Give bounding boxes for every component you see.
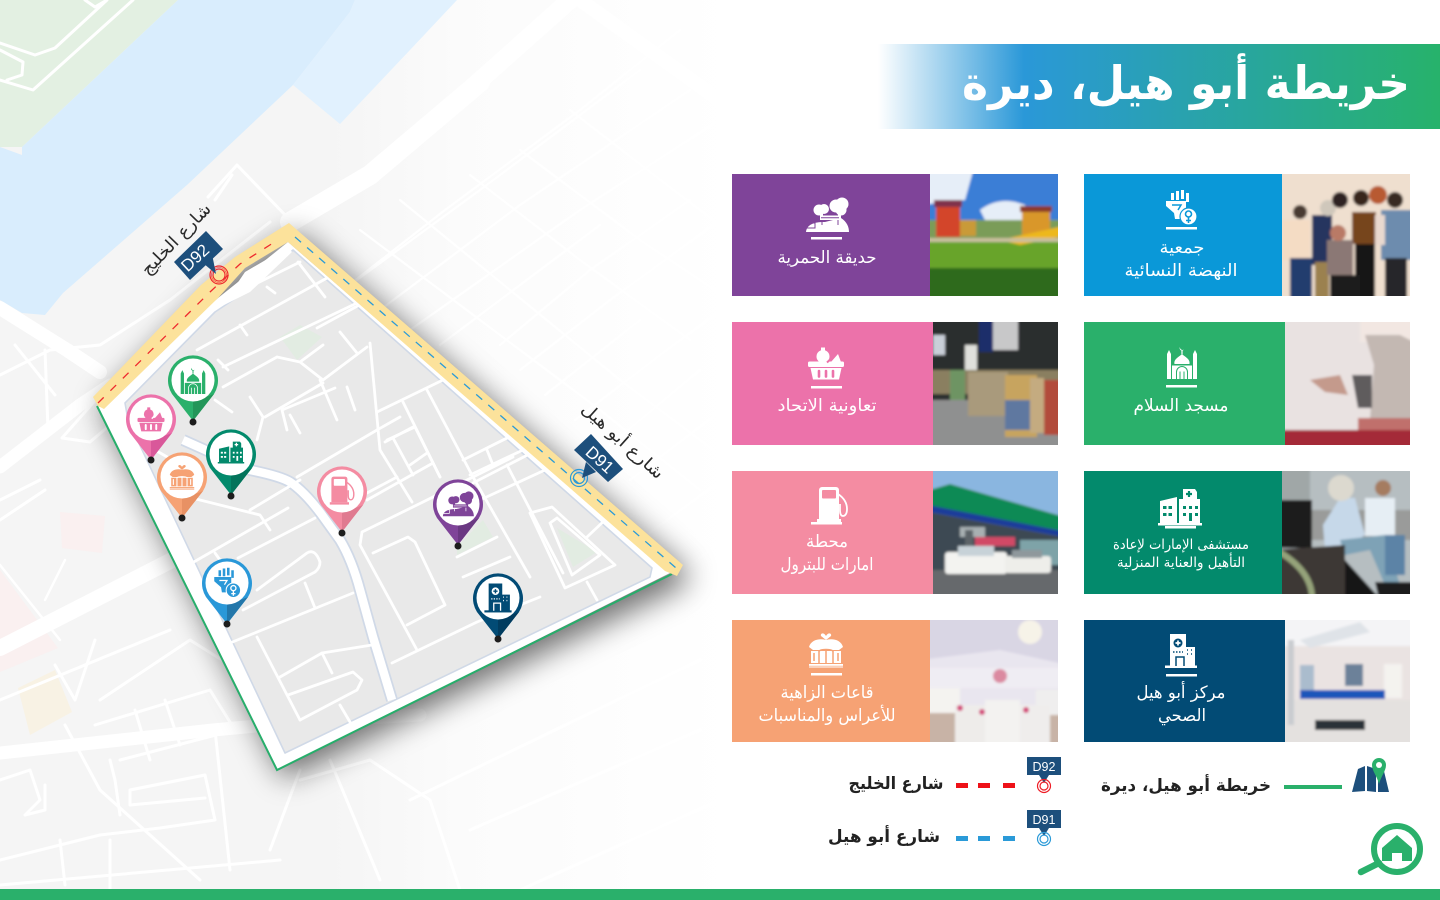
photo: playground bbox=[930, 174, 1058, 296]
pin: mosque bbox=[168, 355, 218, 426]
logo: magnifier with house bbox=[1361, 826, 1420, 872]
pin: basket bbox=[126, 394, 176, 464]
district blocks bbox=[125, 250, 652, 753]
card: Abu Hail health center: الصحي bbox=[1158, 706, 1206, 726]
icon: mosque bbox=[1167, 347, 1197, 379]
card: Al Zahiya wedding halls: قاعات الزاهية bbox=[780, 683, 874, 703]
road label: أبو هيل: شارع أبو هيل bbox=[577, 398, 669, 484]
photo: doctor and patient bbox=[1282, 471, 1410, 594]
pin: health center bbox=[473, 573, 523, 642]
icon: hospital bbox=[1158, 489, 1202, 526]
legend: map area: خريطة أبو هيل، ديرة bbox=[1101, 774, 1271, 796]
D92 marker: D92 bbox=[177, 240, 213, 276]
legend: D92 road: شارع الخليج bbox=[848, 774, 944, 794]
card: Emarat petrol station: محطة bbox=[806, 532, 848, 552]
pin: hospital bbox=[206, 429, 256, 500]
pin: hall bbox=[157, 452, 207, 522]
card: Al Salam mosque bbox=[1084, 322, 1410, 445]
card: Abu Hail health center: مركز أبو هيل bbox=[1136, 681, 1226, 703]
card: Al Hamriya park bbox=[732, 174, 1058, 296]
title banner bbox=[878, 44, 1440, 129]
card: women's renaissance association bbox=[1084, 174, 1410, 296]
icon: fuel pump bbox=[817, 487, 847, 522]
card: Emarat petrol station bbox=[732, 471, 1058, 594]
photo: petrol station bbox=[933, 471, 1058, 594]
photo: wedding hall bbox=[930, 620, 1058, 742]
title banner: خريطة أبو هيل، ديرة bbox=[962, 53, 1410, 110]
icon: medical building bbox=[1165, 634, 1197, 668]
photo: supermarket bbox=[933, 322, 1058, 445]
major roads bbox=[0, 0, 740, 753]
district map area bbox=[97, 242, 672, 770]
pin: women's association bbox=[202, 558, 252, 628]
legend: D91 road: D91 bbox=[1033, 813, 1056, 827]
icon: folded map bbox=[1352, 758, 1389, 792]
map shadow bbox=[100, 232, 690, 779]
card: Abu Hail health center bbox=[1084, 620, 1410, 742]
card: Emarat petrol station: امارات للبترول bbox=[780, 555, 874, 575]
card: Emirates rehabilitation hospital: التأهيل والعناية المنزلية bbox=[1117, 552, 1245, 571]
photo: prayer bbox=[1285, 322, 1410, 445]
card: women's renaissance association: النهضة النسائية bbox=[1124, 261, 1238, 281]
blue dashed road bbox=[295, 237, 676, 568]
photo: operating room bbox=[1285, 620, 1410, 742]
red dashed road bbox=[98, 243, 273, 403]
card: Emirates rehabilitation hospital bbox=[1084, 471, 1410, 594]
card: Union Coop: تعاونية الاتحاد bbox=[778, 396, 877, 416]
highlighted roads bbox=[93, 223, 683, 576]
icon: fist and female symbol bbox=[1166, 190, 1197, 225]
pin: park bbox=[433, 479, 483, 550]
legend: D92 road: D92 bbox=[1033, 760, 1056, 774]
card: Al Hamriya park: حديقة الحمرية bbox=[778, 248, 876, 268]
pin: fuel bbox=[317, 466, 367, 536]
legend: D91 road: شارع أبو هيل bbox=[828, 825, 940, 847]
photo: group of women bbox=[1282, 174, 1410, 296]
legend: D92 road bbox=[848, 757, 1061, 794]
card: Al Zahiya wedding halls: للأعراس والمناسبات bbox=[758, 705, 896, 726]
road label: الخليج: شارع الخليج bbox=[137, 199, 216, 280]
icon: wedding hall bbox=[809, 633, 843, 668]
D92 marker bbox=[174, 231, 228, 284]
D91 marker: D91 bbox=[582, 442, 618, 477]
card: Emirates rehabilitation hospital: مستشفى الإمارات لإعادة bbox=[1113, 537, 1249, 553]
card: Al Zahiya wedding halls bbox=[732, 620, 1058, 742]
card: Al Salam mosque: مسجد السلام bbox=[1134, 396, 1228, 416]
card: Union Coop bbox=[732, 322, 1058, 445]
boundary line bbox=[97, 406, 672, 770]
D91 marker bbox=[570, 434, 623, 486]
card: women's renaissance association: جمعية bbox=[1160, 238, 1204, 258]
icon: basket bbox=[808, 348, 844, 380]
background street map bbox=[0, 0, 740, 890]
bottom bar bbox=[0, 889, 1440, 900]
icon: park bbox=[806, 198, 849, 232]
legend: map area bbox=[1101, 758, 1389, 796]
legend: D91 road bbox=[828, 810, 1061, 847]
